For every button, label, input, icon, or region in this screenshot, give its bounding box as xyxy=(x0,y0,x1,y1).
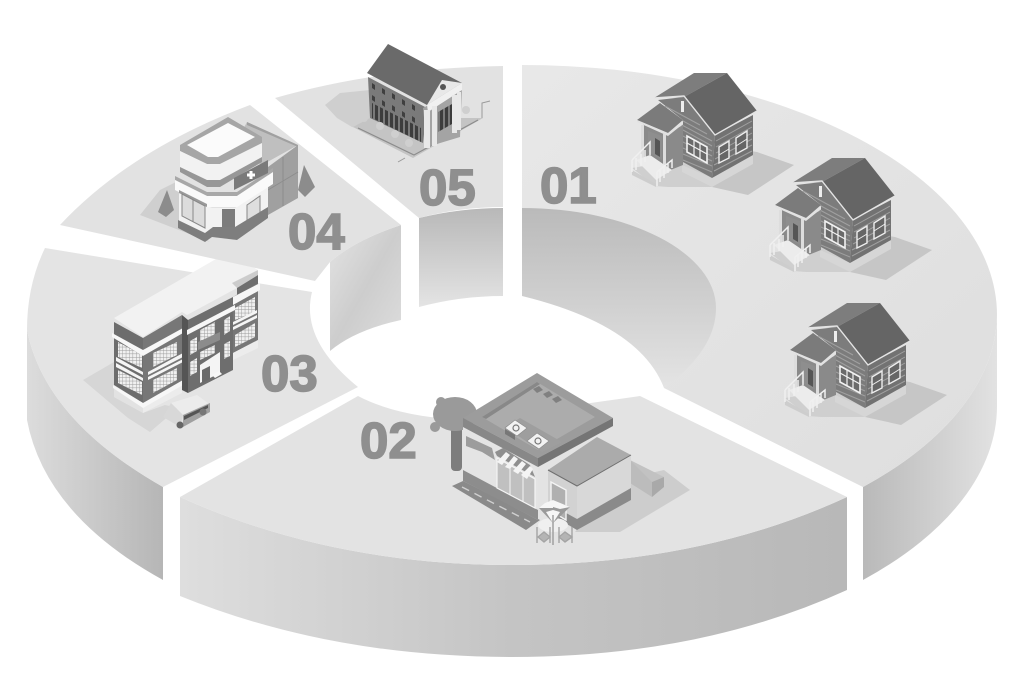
number 03: 03 xyxy=(261,345,318,402)
number 01: 01 xyxy=(540,157,597,214)
number 04: 04 xyxy=(288,203,345,260)
icon: house 1 xyxy=(632,73,794,195)
school white bands xyxy=(112,328,183,356)
05 top face xyxy=(275,66,503,218)
segment 03: school xyxy=(27,248,358,580)
02 front side wall xyxy=(180,497,847,657)
school roof xyxy=(114,252,258,337)
segment 01: residential homes xyxy=(522,65,997,580)
icon: clinic building xyxy=(140,117,315,242)
number 05: 05 xyxy=(419,159,476,216)
icon: house 3 xyxy=(785,303,947,425)
school shadow xyxy=(83,362,178,432)
school left wing, right face xyxy=(143,315,183,413)
school left wing, left face xyxy=(114,322,143,413)
04 inner wall xyxy=(330,225,401,351)
icon: school building xyxy=(83,252,260,432)
01 outer side wall xyxy=(863,315,997,580)
segment 05: library xyxy=(275,44,503,307)
school bus xyxy=(163,395,210,428)
03 outer side wall xyxy=(27,330,163,580)
02 top face xyxy=(180,396,847,565)
icon: house 2 xyxy=(770,158,932,280)
01 inner wall xyxy=(522,200,740,388)
icon: library building xyxy=(325,44,490,162)
segment 04: clinic xyxy=(60,105,401,351)
03 top face xyxy=(27,248,358,487)
01 top face xyxy=(522,65,997,487)
number 02: 02 xyxy=(360,412,417,469)
05 inner wall xyxy=(419,208,503,307)
school center tower xyxy=(182,297,235,393)
segment 02: shop xyxy=(180,373,847,657)
icon: shop building xyxy=(430,373,690,545)
04 top face xyxy=(60,105,401,281)
school right wing xyxy=(228,270,260,360)
